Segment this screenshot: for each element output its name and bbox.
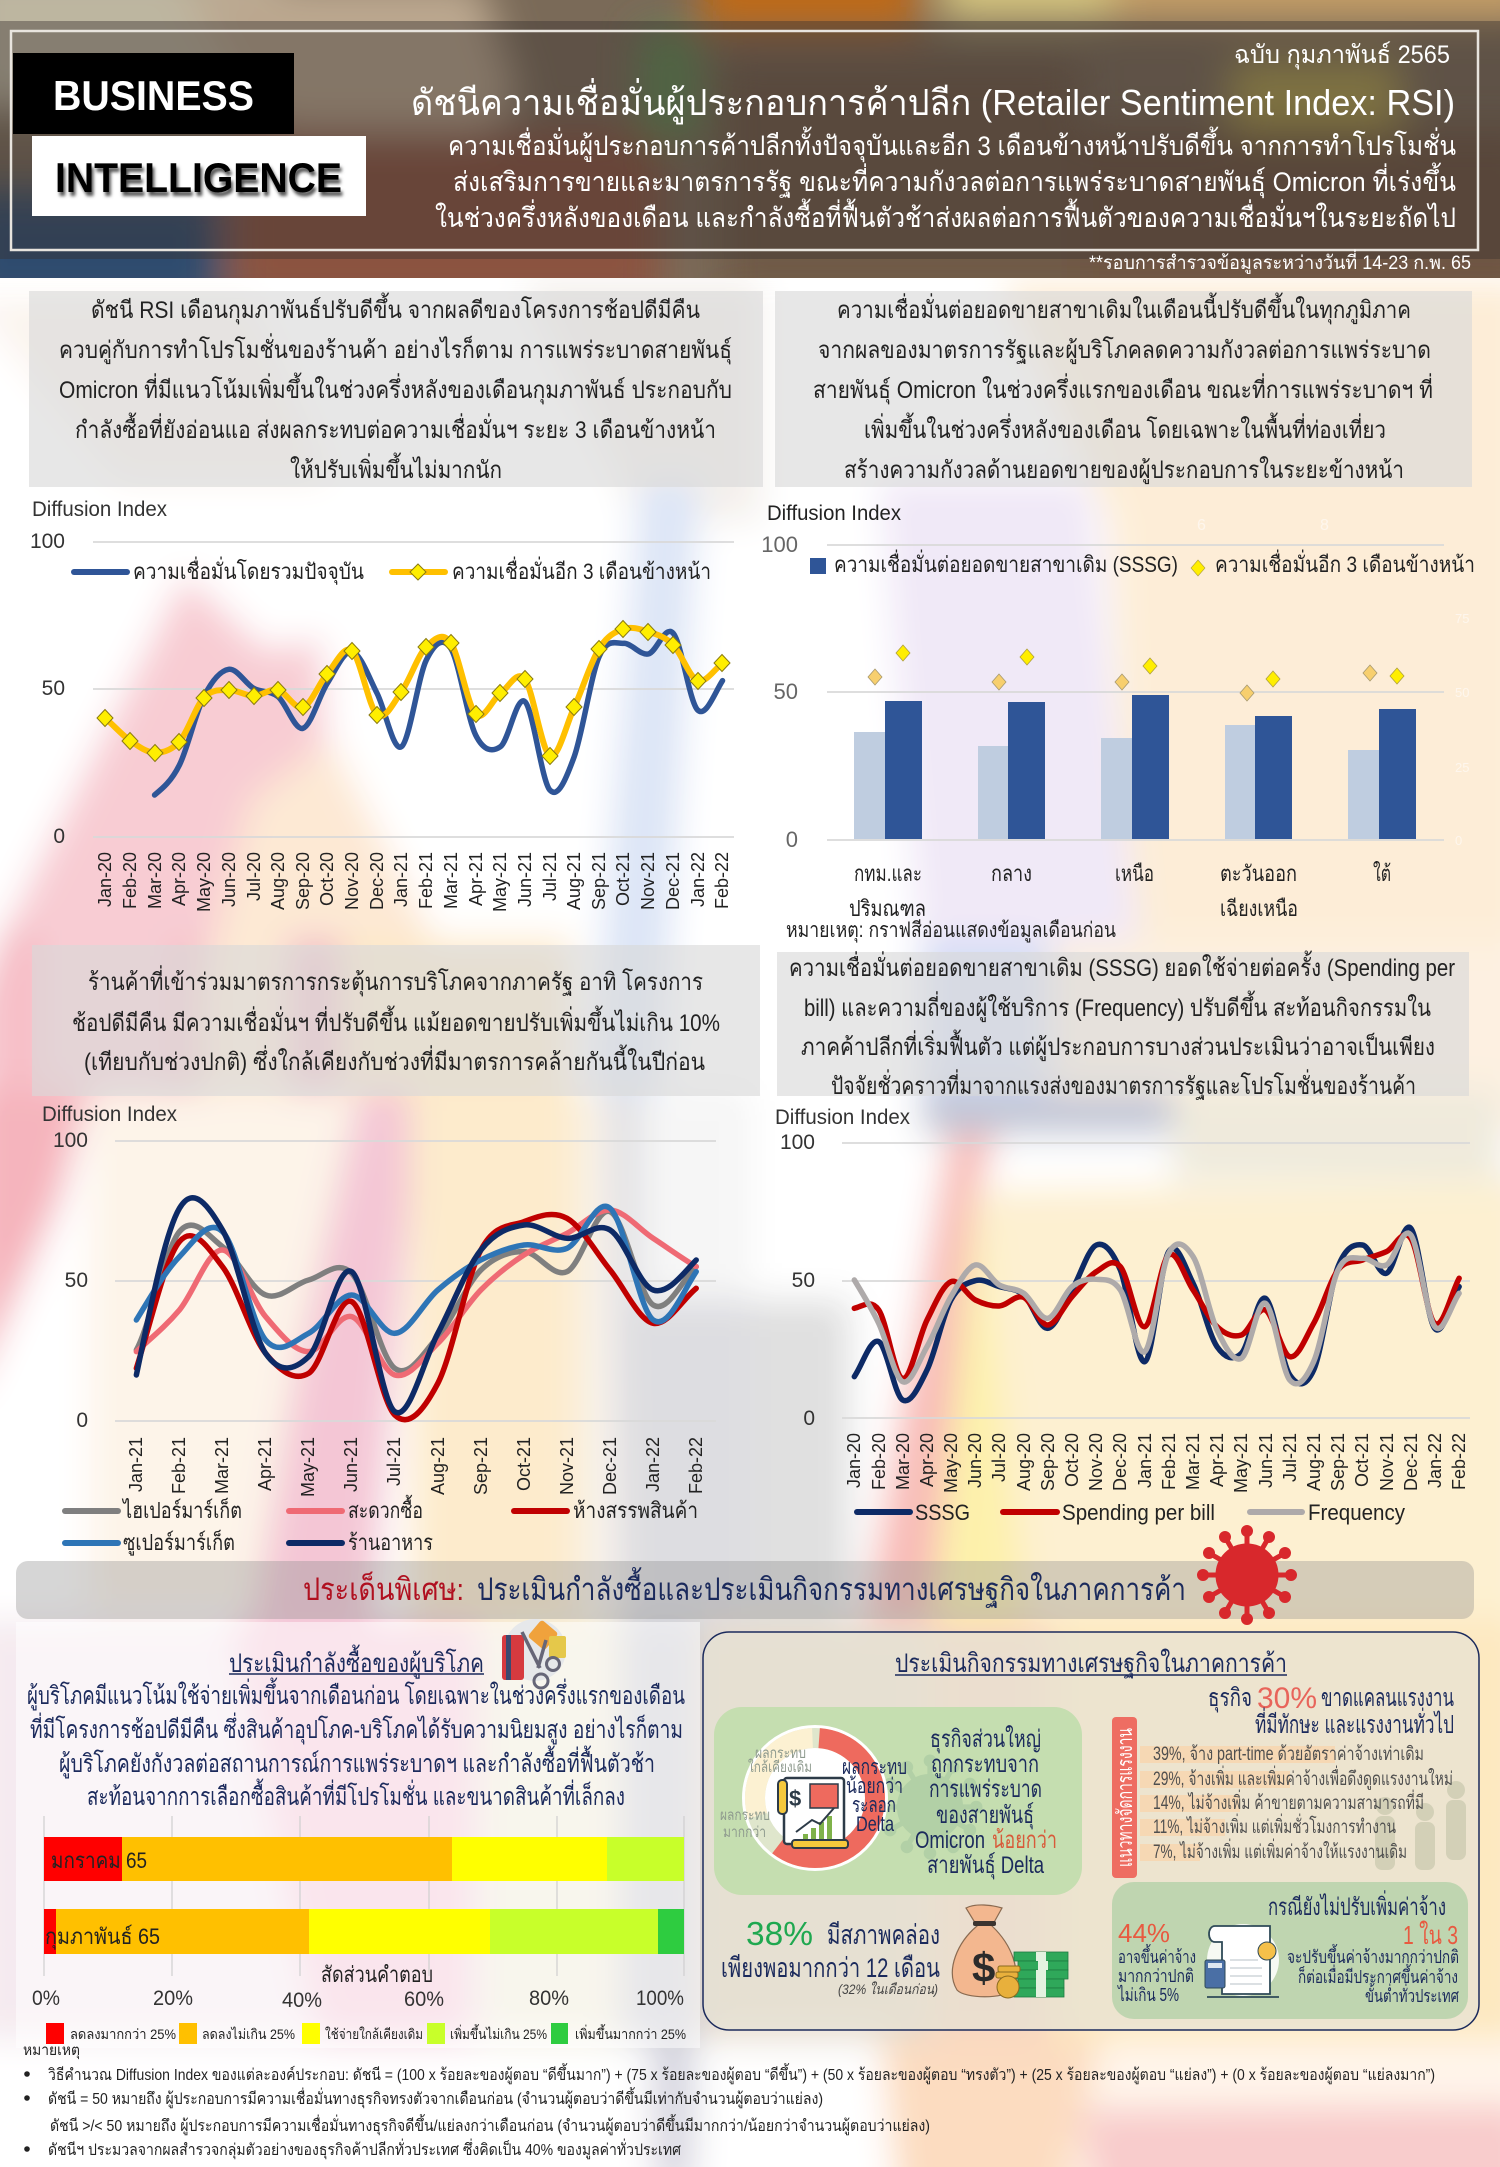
panel: text RSI overview: [29, 291, 763, 487]
text: purchasing power summary: [27, 1677, 685, 1811]
chart: SSSG spending frequency line chart: 100: [780, 1131, 815, 1154]
panel: text RSI overview: กำลังซื้อที่ยังอ่อนแอ ส่งผลกระทบต่อความเชื่อมั่นฯ ระยะ 3 เดือนข้างหน้า: [75, 412, 716, 444]
panel: omicron impact: [714, 1707, 1082, 1895]
header frame: [11, 31, 1478, 250]
chart: SSSG spending frequency line chart: Sep-21: [1328, 1433, 1348, 1491]
chart: SSSG spending frequency line chart: Jul-21: [1280, 1433, 1300, 1482]
header summary: [435, 126, 1456, 233]
donut labels: ผลกระทบ: [842, 1756, 907, 1779]
legend: spending change: เพิ่มขึ้นมากกว่า 25%: [575, 2024, 686, 2042]
icon: red virus: [1198, 1526, 1296, 1624]
legend: spending change: ใช้จ่ายใกล้เคียงเดิม: [325, 2026, 423, 2042]
chart: store type line chart: Jul-21: [384, 1437, 404, 1486]
icon: faded virus: [878, 1755, 982, 1859]
legend: store types: [65, 1495, 698, 1556]
panel: text RSI overview: ควบคู่กับการทำโปรโมชั่นของร้านค้า อย่างไรก็ตาม การแพร่ระบาดสายพันธุ์: [59, 333, 732, 365]
notes: หมายเหตุ: [23, 2042, 80, 2060]
icon: scissors cutting credit cards: [502, 1619, 566, 1688]
notes: ดัชนีฯ ประมวลจากผลสำรวจกลุ่มตัวอย่างของธุรกิจค้าปลีกทั่วประเทศ ซึ่งคิดเป็น 40% ของมูลค่าทั่วประเทศ: [48, 2138, 681, 2160]
callout: 38 percent liquidity: [721, 1915, 940, 1997]
logo: INTELLIGENCE: INTELLIGENCE: [55, 154, 342, 201]
chart: SSSG by region bar chart: 50: [774, 679, 798, 704]
chart: stacked spending change bars: มกราคม 65: [51, 1848, 147, 1873]
chart: store type line chart: Dec-21: [600, 1437, 620, 1495]
chart: overall sentiment line chart: Diffusion Index: [32, 498, 167, 521]
chart: SSSG spending frequency line chart: Nov-20: [1086, 1433, 1106, 1491]
text: omicron impact summary: Omicron: [915, 1827, 985, 1854]
panel: special topic banner: [16, 1561, 1474, 1619]
chart: stacked spending change bars: 20%: [153, 1987, 193, 2010]
panel: text SSSG by region: จากผลของมาตรการรัฐและผู้บริโภคลดความกังวลต่อการแพร่ระบาด: [818, 336, 1431, 365]
chart: SSSG spending frequency line chart: Jan-20: [844, 1433, 864, 1488]
panel: text RSI overview: ให้ปรับเพิ่มขึ้นไม่มากนัก: [290, 452, 502, 484]
chart: SSSG spending frequency line chart: Jul-20: [989, 1433, 1009, 1482]
chart: overall sentiment line chart: Dec-21: [663, 852, 683, 910]
panel: text SSSG by region: ความเชื่อมั่นต่อยอดขายสาขาเดิมในเดือนนี้ปรับดีขึ้นในทุกภูมิภาค: [837, 292, 1411, 325]
chart: stacked spending change bars: กุมภาพันธ์ 65: [45, 1924, 160, 1950]
chart: overall sentiment line chart: 50: [42, 677, 65, 700]
chart: store type line chart: May-21: [298, 1437, 318, 1497]
legend: SSSG spending frequency: [857, 1500, 1405, 1525]
chart: SSSG spending frequency line chart: Jan-21: [1135, 1433, 1155, 1488]
chart: store type line chart: Aug-21: [428, 1437, 448, 1495]
chart: overall sentiment line chart: 100: [30, 530, 65, 553]
legend: store types: ไฮเปอร์มาร์เก็ต: [121, 1496, 242, 1523]
chart: overall sentiment line chart: Oct-20: [317, 852, 337, 906]
chart: overall sentiment line chart: Aug-21: [564, 852, 584, 910]
chart: overall sentiment line chart: Nov-21: [638, 852, 658, 910]
chart: store type line chart: Jun-21: [341, 1437, 361, 1492]
chart note: หมายเหตุ: กราฟสีอ่อนแสดงข้อมูลเดือนก่อน: [786, 919, 1116, 943]
chart: overall sentiment line chart: Oct-21: [613, 852, 633, 906]
donut labels: ผลกระทบ: [720, 1807, 770, 1824]
chart: store type line chart: Feb-21: [169, 1437, 189, 1494]
chart: store type line chart: Feb-22: [686, 1437, 706, 1494]
legend: spending change: [46, 2023, 686, 2044]
stat: 44 percent: 44%: [1118, 1918, 1170, 1948]
chart: store type line chart: 100: [53, 1129, 88, 1152]
chart: SSSG spending frequency line chart: Aug-21: [1304, 1433, 1324, 1491]
callout: 30 percent labor shortage: [1208, 1682, 1454, 1739]
legend: spending change: เพิ่มขึ้นไม่เกิน 25%: [450, 2024, 547, 2042]
chart: overall sentiment line chart: Feb-21: [416, 852, 436, 909]
chart: overall sentiment line chart: Apr-21: [466, 852, 486, 906]
chart: SSSG by region bar chart: Diffusion Index: [767, 502, 901, 525]
chart: overall sentiment line chart: Sep-21: [589, 852, 609, 910]
stat: 1 in 3: [1287, 1920, 1459, 2006]
stat: 44 percent: [1116, 1918, 1196, 2005]
chart: store type line chart: Mar-21: [212, 1437, 232, 1494]
panel: text store types: [32, 945, 760, 1096]
axis labels: regions: [849, 861, 1391, 921]
chart: store type line chart: 0: [76, 1409, 88, 1432]
chart: SSSG by region bar chart: 50: [1455, 685, 1469, 700]
donut labels: น้อยกว่า: [846, 1775, 903, 1798]
chart: stacked spending change bars: 0%: [32, 1987, 60, 2010]
axis labels: regions: กทม.และ: [854, 861, 922, 886]
chart: overall sentiment line chart: Mar-21: [441, 852, 461, 909]
legend: store types: ร้านอาหาร: [348, 1530, 433, 1555]
axis labels: regions: กลาง: [991, 861, 1032, 886]
chart: overall sentiment line chart: [30, 498, 734, 912]
chart: store type line chart: [42, 1103, 716, 1556]
chart: SSSG spending frequency line chart: Jun-20: [965, 1433, 985, 1488]
panel: economic activity in trade sector: [703, 1632, 1479, 2030]
axis labels: regions: เหนือ: [1115, 861, 1154, 886]
text: omicron impact summary: ของสายพันธุ์: [936, 1801, 1034, 1830]
chart: SSSG by region bar chart: 6: [1197, 517, 1206, 534]
legend: SSSG by region: [810, 549, 1475, 577]
chart: SSSG by region bar chart: 8: [1320, 517, 1329, 534]
chart: stacked spending change bars: 60%: [404, 1988, 444, 2011]
panel: header banner: [0, 0, 1500, 278]
chart: overall sentiment line chart: Nov-20: [342, 852, 362, 910]
chart: stacked spending change bars: 80%: [529, 1987, 569, 2010]
chart: SSSG spending frequency line chart: 50: [792, 1269, 815, 1292]
chart: SSSG spending frequency line chart: May-20: [941, 1433, 961, 1493]
text: omicron impact summary: [915, 1725, 1057, 1880]
panel: wage adjustment: [1112, 1882, 1468, 2019]
panel: text store types: ร้านค้าที่เข้าร่วมมาตรการกระตุ้นการบริโภคจากภาครัฐ อาทิ โครงการ: [88, 965, 703, 997]
text: omicron impact summary: ถูกกระทบจาก: [931, 1751, 1039, 1779]
logo: BUSINESS: BUSINESS: [53, 72, 254, 119]
legend: spending change: ลดลงไม่เกิน 25%: [202, 2026, 295, 2042]
chart: SSSG spending frequency line chart: Diffusion Index: [775, 1106, 910, 1129]
donut labels: [720, 1745, 907, 1841]
chart: SSSG spending frequency line chart: May-21: [1231, 1433, 1251, 1493]
panel: text RSI overview: ดัชนี RSI เดือนกุมภาพันธ์ปรับดีขึ้น จากผลดีของโครงการช้อปดีมีคืน: [91, 292, 700, 325]
icon: money bag with coins and banknotes: [952, 1905, 1068, 1998]
panel: consumer purchasing power: [16, 1619, 700, 2048]
heading: purchasing power: ประเมินกำลังซื้อของผู้บริโภค: [229, 1644, 484, 1679]
chart: stacked spending change bars: สัดส่วนคำตอบ: [321, 1962, 433, 1987]
legend: SSSG by region: ความเชื่อมั่นต่อยอดขายสาขาเดิม (SSSG): [834, 549, 1178, 577]
chart: SSSG spending frequency line chart: Oct-21: [1352, 1433, 1372, 1487]
icon: receipt and calculator: [1205, 1924, 1279, 1997]
callout: 38 percent liquidity: มีสภาพคล่อง: [827, 1920, 940, 1950]
text: purchasing power summary: ผู้บริโภคยังกังวลต่อสถานการณ์การแพร่ระบาดฯ และกำลังซื้อที่ฟื้นตัวช้า: [59, 1745, 655, 1779]
legend: SSSG spending frequency: Frequency: [1308, 1500, 1405, 1525]
panel: text store types: (เทียบกับช่วงปกติ) ซึ่งใกล้เคียงกับช่วงที่มีมาตรการคล้ายกันนี้ในปีก่อน: [84, 1044, 705, 1076]
chart: overall sentiment line chart: Apr-20: [169, 852, 189, 906]
chart: store type line chart: Jan-22: [643, 1437, 663, 1492]
panel: text SSSG by region: สร้างความกังวลด้านยอดขายของผู้ประกอบการในระยะข้างหน้า: [844, 456, 1404, 485]
donut labels: Delta: [856, 1813, 894, 1836]
chart: SSSG spending frequency line chart: Jun-21: [1256, 1433, 1276, 1488]
logo: INTELLIGENCE: INTELLIGENCE: [57, 158, 344, 205]
chart: SSSG spending frequency line chart: Nov-21: [1377, 1433, 1397, 1491]
chart: overall sentiment line chart: Feb-20: [120, 852, 140, 909]
panel: text SSSG by region: เพิ่มขึ้นในช่วงครึ่งหลังของเดือน โดยเฉพาะในพื้นที่ท่องเที่ยว: [864, 412, 1386, 444]
callout: 30 percent labor shortage: ธุรกิจ: [1208, 1684, 1252, 1713]
chart: SSSG spending frequency line chart: Jan-22: [1425, 1433, 1445, 1488]
callout: 38 percent liquidity: 38%: [746, 1915, 813, 1952]
notes: ดัชนี = 50 หมายถึง ผู้ประกอบการมีความเชื่อมั่นทางธุรกิจทรงตัวจากเดือนก่อน (จำนวนผู้ตอบว่าดีขึ้นมีเท่ากับจำนวนผู้ตอบว่าแย่ลง): [48, 2087, 823, 2109]
chart: store type line chart: 50: [65, 1269, 88, 1292]
chart: SSSG spending frequency line chart: [775, 1106, 1470, 1525]
chart: overall sentiment line chart: Sep-20: [293, 852, 313, 910]
list: labor measures: [1140, 1744, 1453, 1863]
chart: overall sentiment line chart: Jan-21: [391, 852, 411, 907]
chart: overall sentiment line chart: Jun-21: [515, 852, 535, 907]
axis labels: regions: ใต้: [1373, 861, 1391, 886]
chart: SSSG by region bar chart: [761, 502, 1475, 943]
chart: overall sentiment line chart: Dec-20: [367, 852, 387, 910]
notes: [23, 2042, 1435, 2160]
donut labels: ผลกระทบ: [755, 1745, 806, 1762]
legend: store types: สะดวกซื้อ: [348, 1495, 423, 1523]
stat: 1 in 3: ขั้นต่ำทั่วประเทศ: [1365, 1983, 1459, 2006]
chart: SSSG spending frequency line chart: Mar-20: [893, 1433, 913, 1490]
text: omicron impact summary: การแพร่ระบาด: [929, 1776, 1042, 1803]
chart: SSSG by region bar chart: 0: [786, 827, 798, 852]
issue date: ฉบับ กุมภาพันธ์ 2565: [1234, 41, 1450, 70]
chart: overall sentiment line chart: Aug-20: [268, 852, 288, 910]
icon: faded people: [1375, 1781, 1466, 1870]
chart: SSSG by region bar chart: 25: [1455, 760, 1469, 775]
text: omicron impact summary: น้อยกว่า: [992, 1827, 1057, 1854]
chart: overall sentiment line chart: May-20: [194, 852, 214, 912]
chart: overall sentiment line chart: Jan-22: [688, 852, 708, 907]
panel: special topic banner: ประเมินกำลังซื้อและประเมินกิจกรรมทางเศรษฐกิจในภาคการค้า: [477, 1567, 1186, 1608]
axis labels: regions: ตะวันออก: [1220, 861, 1297, 886]
chart: SSSG spending frequency line chart: Feb-22: [1449, 1433, 1469, 1490]
chart: SSSG spending frequency line chart: Feb-20: [869, 1433, 889, 1490]
chart: SSSG spending frequency line chart: 0: [803, 1407, 815, 1430]
stat: 44 percent: มากกว่าปกติ: [1118, 1966, 1194, 1986]
chart: overall sentiment line chart: Feb-22: [712, 852, 732, 909]
panel: text RSI overview: Omicron ที่มีแนวโน้มเพิ่มขึ้นในช่วงครึ่งหลังของเดือนกุมภาพันธ์ ประกอบกับ: [59, 372, 732, 405]
chart: stacked spending change bars: 40%: [282, 1989, 322, 2012]
icon: financial report document: [778, 1778, 848, 1848]
chart: overall sentiment line chart: Mar-20: [145, 852, 165, 909]
legend: store types: ห้างสรรพสินค้า: [573, 1498, 698, 1523]
chart: overall sentiment line chart: 0: [53, 825, 65, 848]
chart: SSSG spending frequency line chart: Oct-20: [1062, 1433, 1082, 1487]
stat: 1 in 3: 1 ใน 3: [1403, 1920, 1458, 1950]
chart: store type line chart: Nov-21: [557, 1437, 577, 1495]
text: purchasing power summary: ผู้บริโภคมีแนวโน้มใช้จ่ายเพิ่มขึ้นจากเดือนก่อน โดยเฉพาะในช่วงครึ่งแรกของเดือน: [27, 1677, 685, 1711]
chart: overall sentiment line chart: Jul-20: [244, 852, 264, 901]
chart: SSSG by region bar chart: 100: [761, 532, 798, 557]
panel: text store types: ช้อปดีมีคืน มีความเชื่อมั่นฯ ที่ปรับดีขึ้น แม้ยอดขายปรับเพิ่มขึ้นไม่เกิน 10%: [72, 1005, 720, 1037]
donut labels: ใกล้เคียงเดิม: [748, 1758, 812, 1776]
chart: overall sentiment line chart: Jun-20: [219, 852, 239, 907]
chart: overall sentiment line chart: May-21: [490, 852, 510, 912]
survey note: **รอบการสำรวจข้อมูลระหว่างวันที่ 14-23 ก.พ. 65: [1089, 249, 1471, 274]
chart: SSSG spending frequency line chart: Dec-20: [1110, 1433, 1130, 1491]
logo: INTELLIGENCE: [32, 136, 366, 216]
chart: SSSG spending frequency line chart: Apr-21: [1207, 1433, 1227, 1487]
callout: 30 percent labor shortage: 30%: [1257, 1682, 1317, 1715]
text: omicron impact summary: สายพันธุ์ Delta: [927, 1851, 1044, 1880]
chart: stacked spending change bars: [32, 1816, 684, 2012]
panel: special topic banner: ประเด็นพิเศษ:: [303, 1571, 464, 1607]
chart: SSSG spending frequency line chart: Mar-21: [1183, 1433, 1203, 1490]
panel: text SSSG by region: [775, 291, 1472, 487]
title: ดัชนีความเชื่อมั่นผู้ประกอบการค้าปลีก (Retailer Sentiment Index: RSI): [411, 78, 1455, 125]
chart: stacked spending change bars: 100%: [636, 1987, 684, 2010]
chart: overall sentiment line chart: Jul-21: [540, 852, 560, 901]
legend: store types: ซูเปอร์มาร์เก็ต: [123, 1528, 235, 1556]
text: purchasing power summary: สะท้อนจากการเลือกซื้อสินค้าที่มีโปรโมชั่น และขนาดสินค้าที่เล็กลง: [87, 1778, 625, 1811]
stat: 44 percent: อาจขึ้นค่าจ้าง: [1118, 1944, 1196, 1967]
donut labels: มากกว่า: [723, 1824, 766, 1841]
labor management bar: [1112, 1717, 1137, 1878]
text: purchasing power summary: ที่มีโครงการช้อปดีมีคืน ซึ่งสินค้าอุปโภค-บริโภคได้รับความนิยมสูง อย่างไรก็ตาม: [30, 1712, 683, 1745]
legend: overall sentiment: ความเชื่อมั่นโดยรวมปัจจุบัน: [133, 556, 364, 585]
legend: SSSG spending frequency: SSSG: [915, 1500, 970, 1525]
chart: store type line chart: Jan-21: [126, 1437, 146, 1492]
legend: SSSG spending frequency: Spending per bill: [1062, 1500, 1215, 1525]
chart: store type line chart: Apr-21: [255, 1437, 275, 1491]
chart: SSSG by region bar chart: 0: [1455, 833, 1462, 848]
chart: SSSG spending frequency line chart: Aug-20: [1014, 1433, 1034, 1491]
labor management bar: แนวทางจัดการแรงงาน: [1114, 1728, 1137, 1867]
legend: overall sentiment: [74, 556, 711, 585]
donut labels: ระลอก: [852, 1794, 896, 1817]
logo: BUSINESS: [13, 53, 294, 134]
notes: ดัชนี >/< 50 หมายถึง ผู้ประกอบการมีความเชื่อมั่นทางธุรกิจดีขึ้น/แย่ลงกว่าเดือนก่อน (จำนวนผู้ตอบว่าดีขึ้นมีมากกว่า/น้อยกว่าจำนวนผู้ตอบว่าแย่ลง): [50, 2114, 930, 2136]
chart: store type line chart: Oct-21: [514, 1437, 534, 1491]
chart: SSSG spending frequency line chart: Sep-20: [1038, 1433, 1058, 1491]
chart: store type line chart: Sep-21: [471, 1437, 491, 1495]
legend: spending change: ลดลงมากกว่า 25%: [70, 2026, 176, 2042]
stat: 44 percent: ไม่เกิน 5%: [1116, 1984, 1179, 2005]
list: labor measures: 7%, ไม่จ้างเพิ่ม แต่เพิ่มค่าจ้างให้แรงงานเดิม: [1153, 1838, 1407, 1863]
chart: SSSG spending frequency line chart: Dec-21: [1401, 1433, 1421, 1491]
axis labels: regions: ปริมณฑล: [849, 896, 926, 921]
list: labor measures: 11%, ไม่จ้างเพิ่ม แต่เพิ่มชั่วโมงการทำงาน: [1153, 1813, 1396, 1838]
chart: overall sentiment line chart: Jan-20: [95, 852, 115, 907]
legend: overall sentiment: ความเชื่อมั่นอีก 3 เดือนข้างหน้า: [452, 556, 711, 584]
icon: financial report document: $: [789, 1786, 801, 1811]
heading: economic activity: ประเมินกิจกรรมทางเศรษฐกิจในภาคการค้า: [895, 1648, 1287, 1679]
chart: impact donut: [749, 1732, 881, 1864]
axis labels: regions: เฉียงเหนือ: [1220, 896, 1298, 921]
callout: 38 percent liquidity: เพียงพอมากกว่า 12 เดือน: [721, 1953, 940, 1983]
callout: 38 percent liquidity: (32% ในเดือนก่อน): [838, 1981, 938, 1997]
icon: money bag with coins and banknotes: $: [972, 1944, 995, 1991]
chart: SSSG spending frequency line chart: Apr-20: [917, 1433, 937, 1487]
text: omicron impact summary: ธุรกิจส่วนใหญ่: [930, 1725, 1041, 1754]
chart: SSSG spending frequency line chart: Feb-21: [1159, 1433, 1179, 1490]
chart: SSSG by region bar chart: 75: [1455, 611, 1469, 626]
panel: text SSSG spending frequency: [777, 950, 1469, 1100]
chart: store type line chart: Diffusion Index: [42, 1103, 177, 1126]
